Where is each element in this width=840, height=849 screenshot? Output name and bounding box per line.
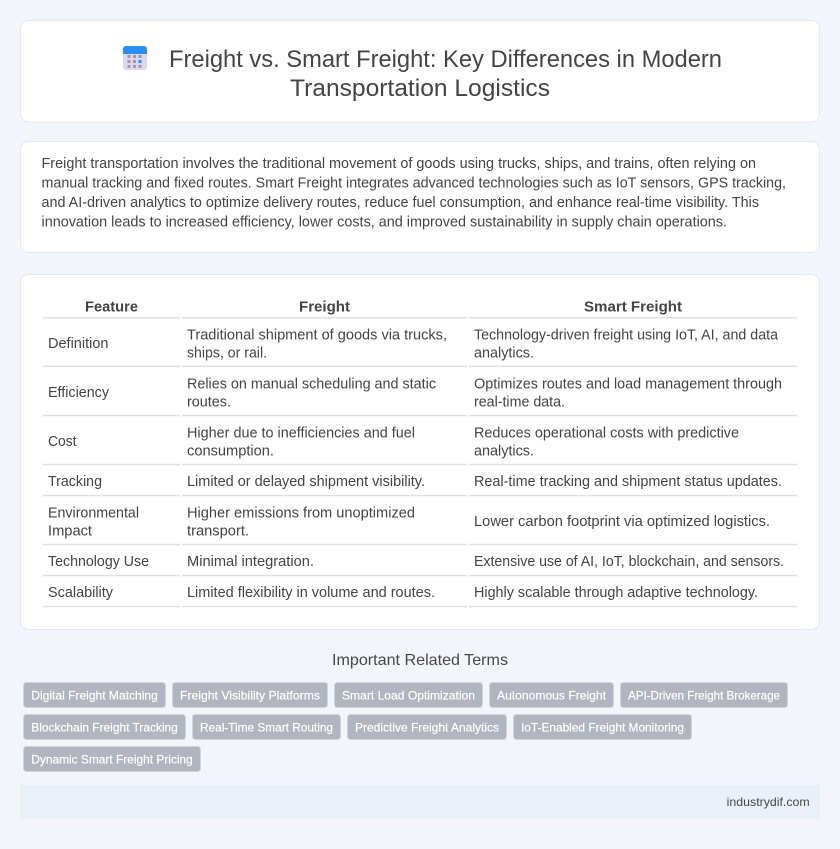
- tag: freight visibility platforms: [172, 682, 328, 708]
- tag: real-time smart routing: [192, 714, 340, 740]
- tag: api-driven freight brokerage: API-Driven Freight Brokerage: [628, 688, 780, 702]
- row: technology use: Minimal integration.: [187, 554, 314, 570]
- title: Transportation Logistics: [290, 75, 550, 102]
- tag list: [24, 682, 788, 772]
- panel: header: [20, 20, 820, 122]
- row: efficiency: real-time data.: [474, 394, 565, 410]
- row: technology use: [48, 554, 784, 570]
- row: environmental impact: transport.: [187, 524, 249, 540]
- tag: autonomous freight: [490, 682, 614, 708]
- row: environmental impact: Lower carbon footprint via optimized logistics.: [474, 514, 770, 530]
- row: definition: [48, 328, 778, 362]
- tag: iot-enabled freight monitoring: [514, 714, 692, 740]
- panel: comparison table: [20, 274, 820, 630]
- row: definition: ships, or rail.: [187, 346, 267, 362]
- row: technology use: Technology Use: [48, 554, 149, 570]
- tag: digital freight matching: [24, 682, 166, 708]
- table header row: Freight: [299, 298, 350, 316]
- row: environmental impact: Impact: [48, 524, 92, 540]
- panel: intro paragraph: [20, 142, 820, 252]
- text block: intro: manual tracking and fixed routes. Smart Freight integrates advanced technologies such as IoT sensors, GPS tracking,: [42, 176, 786, 192]
- tag: api-driven freight brokerage: [620, 682, 788, 708]
- row: efficiency: [48, 376, 782, 410]
- tag: dynamic smart freight pricing: Dynamic Smart Freight Pricing: [31, 752, 193, 766]
- text block: intro: Freight transportation involves the traditional movement of goods using trucks, ships, and trains, often relying on: [42, 156, 756, 172]
- tag: blockchain freight tracking: Blockchain Freight Tracking: [31, 720, 178, 734]
- tag: blockchain freight tracking: [24, 714, 186, 740]
- row: cost: Higher due to inefficiencies and fuel: [187, 426, 415, 442]
- row: tracking: [48, 474, 782, 490]
- row: tracking: Tracking: [48, 474, 102, 490]
- table header row: Feature: [85, 298, 138, 316]
- icon: calendar grid: [123, 46, 147, 70]
- row: scalability: Scalability: [48, 585, 114, 601]
- row: cost: Reduces operational costs with predictive: [474, 426, 739, 442]
- row: definition: Technology-driven freight using IoT, AI, and data: [474, 328, 778, 344]
- row: tracking: Real-time tracking and shipment status updates.: [474, 474, 782, 490]
- tag: freight visibility platforms: Freight Visibility Platforms: [180, 688, 320, 702]
- tag: real-time smart routing: Real-Time Smart Routing: [200, 720, 333, 734]
- text block: intro: [42, 156, 786, 230]
- tag: predictive freight analytics: [348, 714, 506, 740]
- row: environmental impact: Higher emissions from unoptimized: [187, 506, 415, 522]
- row: cost: consumption.: [187, 444, 274, 460]
- row: definition: analytics.: [474, 346, 534, 362]
- title: Freight vs. Smart Freight: Key Differences in Modern: [169, 46, 722, 73]
- row: scalability: Highly scalable through adaptive technology.: [474, 585, 758, 601]
- row: scalability: Limited flexibility in volume and routes.: [187, 585, 435, 601]
- tag: smart load optimization: [334, 682, 482, 708]
- row: cost: Cost: [48, 434, 76, 450]
- heading: important related terms: Important Related Terms: [332, 652, 508, 669]
- text block: intro: and AI-driven analytics to optimize delivery routes, reduce fuel consumption, and enhance real-time visibility. This: [42, 195, 759, 211]
- row: efficiency: Optimizes routes and load management through: [474, 376, 782, 392]
- row: environmental impact: [48, 506, 770, 540]
- tag: digital freight matching: Digital Freight Matching: [31, 688, 158, 702]
- row: definition: Definition: [48, 336, 108, 352]
- table header row: Smart Freight: [584, 298, 682, 316]
- tag: iot-enabled freight monitoring: IoT-Enabled Freight Monitoring: [521, 720, 684, 734]
- tag: predictive freight analytics: Predictive Freight Analytics: [355, 720, 499, 734]
- row: definition: Traditional shipment of goods via trucks,: [187, 328, 447, 344]
- tag: dynamic smart freight pricing: [24, 746, 200, 772]
- row: efficiency: routes.: [187, 394, 231, 410]
- row: cost: analytics.: [474, 444, 534, 460]
- title: [169, 46, 722, 102]
- tag: smart load optimization: Smart Load Optimization: [342, 688, 475, 702]
- row: technology use: Extensive use of AI, IoT, blockchain, and sensors.: [474, 554, 784, 570]
- text block: intro: innovation leads to increased efficiency, lower costs, and improved sustainability in supply chain operations.: [42, 214, 727, 230]
- row: environmental impact: Environmental: [48, 506, 139, 522]
- table header row: [85, 298, 682, 316]
- row: efficiency: Efficiency: [48, 385, 110, 401]
- row: cost: [48, 426, 739, 460]
- row: scalability: [48, 585, 758, 601]
- row: tracking: Limited or delayed shipment visibility.: [187, 474, 425, 490]
- row: efficiency: Relies on manual scheduling and static: [187, 376, 436, 392]
- tag: autonomous freight: Autonomous Freight: [497, 688, 607, 702]
- footer bar: [20, 785, 820, 819]
- footer text: source: industrydif.com: [727, 795, 810, 809]
